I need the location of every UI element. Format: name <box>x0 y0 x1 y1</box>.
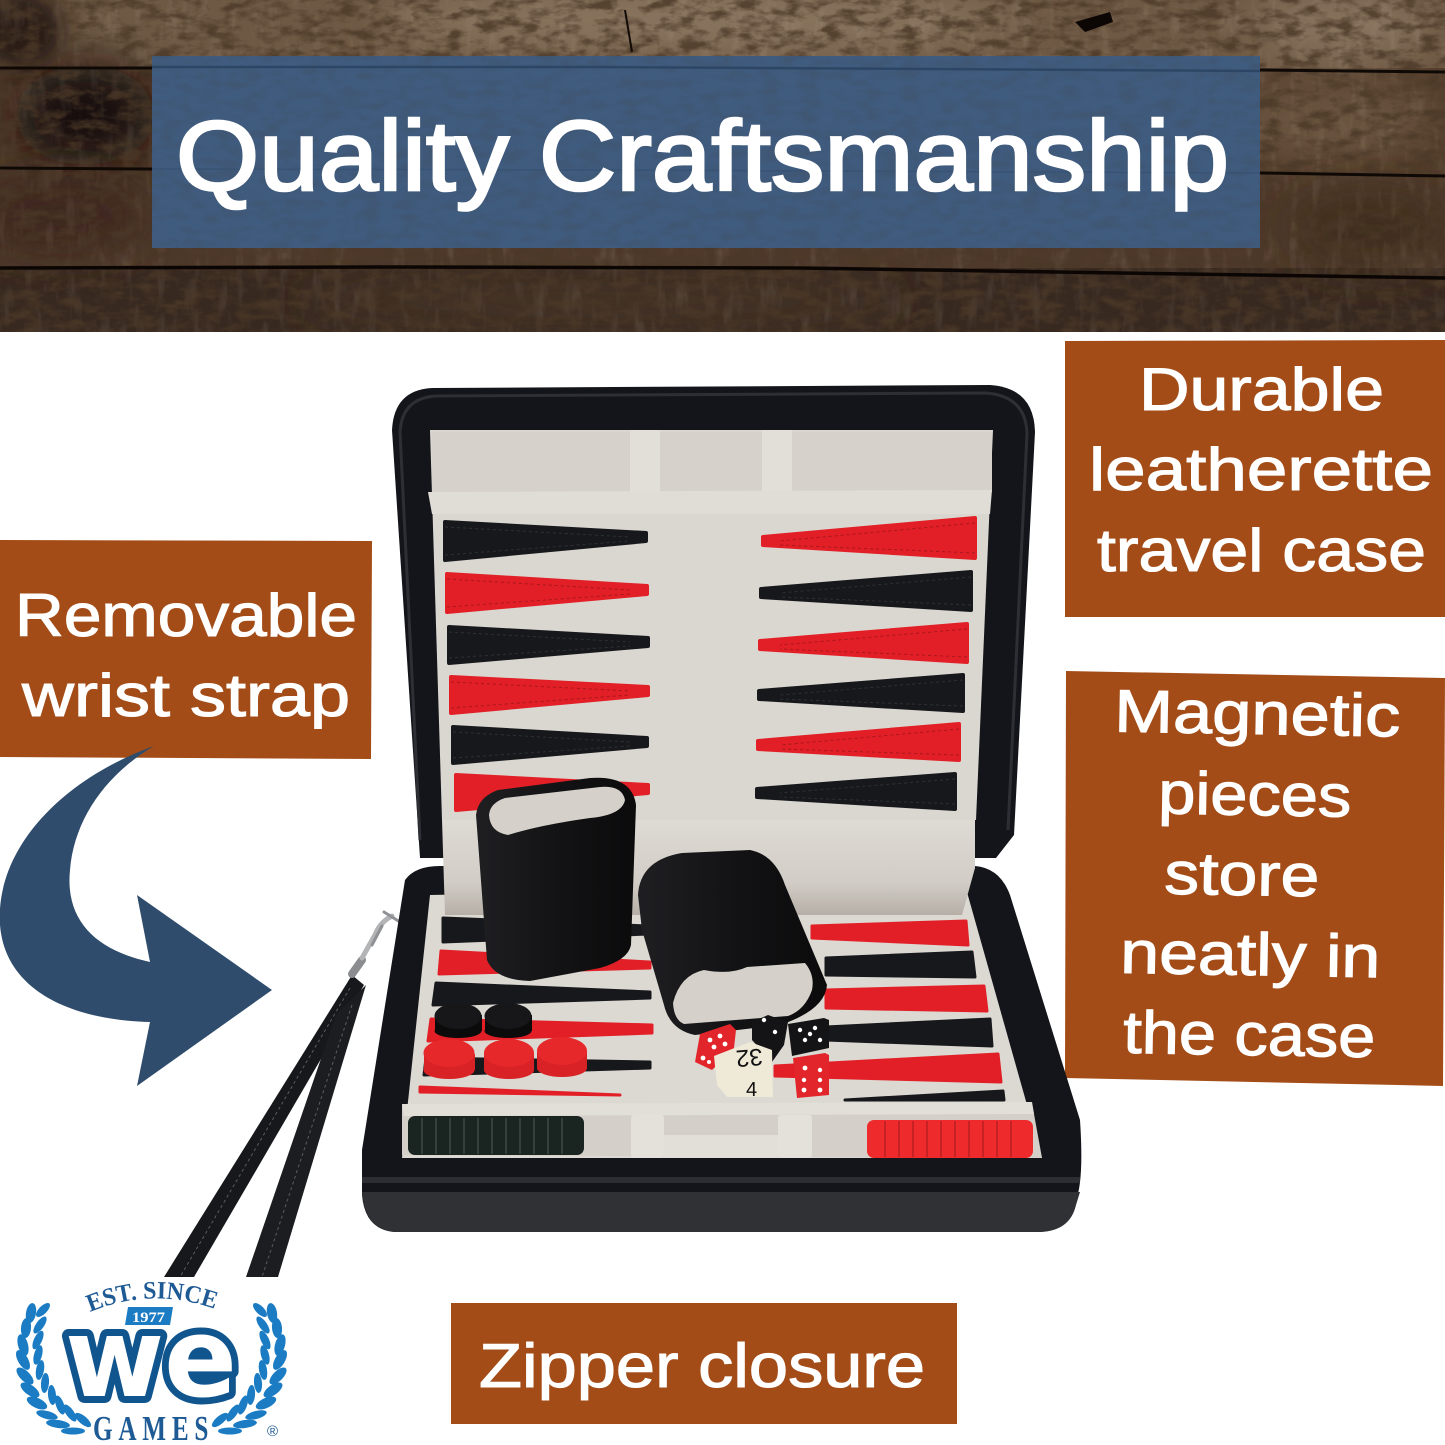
callout: zipper closure <box>451 1303 957 1424</box>
callout: durable leatherette travel case: Durable <box>1139 356 1384 423</box>
callout: durable leatherette travel case <box>1065 340 1445 617</box>
title banner <box>152 56 1260 248</box>
lower board points <box>420 918 1004 1100</box>
callout: durable leatherette travel case: travel case <box>1097 517 1426 584</box>
upper lid <box>392 385 1035 858</box>
lid tray <box>428 430 992 514</box>
callout: removable wrist strap: wrist strap <box>21 662 350 729</box>
dice: 4 <box>746 1079 757 1101</box>
callout: removable wrist strap: Removable <box>15 582 357 649</box>
laurel right <box>210 1301 290 1434</box>
lying dice cup <box>638 850 827 1035</box>
arrow pointing to strap <box>0 746 272 1086</box>
standing dice cup <box>476 778 636 981</box>
clasp <box>352 912 400 974</box>
callout: durable leatherette travel case: leatherette <box>1089 436 1433 503</box>
callout: magnetic pieces: store <box>1164 840 1320 909</box>
dice: 32 <box>735 1042 764 1072</box>
zipper line <box>362 1177 1080 1183</box>
base felt <box>402 885 1042 1158</box>
loose checkers <box>424 1003 587 1079</box>
laurel left <box>13 1301 93 1434</box>
est since: EST. SINCE <box>84 1282 218 1312</box>
callout: zipper closure: Zipper closure <box>479 1332 925 1401</box>
wrist strap <box>164 912 400 1277</box>
wood header background <box>0 0 1445 332</box>
case side band <box>362 1192 1080 1232</box>
callout: magnetic pieces: Magnetic <box>1114 678 1401 749</box>
point stitching <box>445 523 975 804</box>
registered mark: ® <box>267 1423 278 1440</box>
riser <box>442 820 975 915</box>
callout: magnetic pieces: neatly in <box>1120 919 1381 990</box>
1977 ribbon <box>125 1307 173 1326</box>
1977 ribbon: 1977 <box>132 1310 166 1326</box>
callout: magnetic pieces: the case <box>1123 999 1376 1070</box>
we wordmark: we <box>65 1294 237 1422</box>
logo: WE Games <box>16 1282 287 1445</box>
black checker stack <box>408 1116 584 1155</box>
lid felt <box>430 430 993 820</box>
title text: Quality Craftsmanship <box>176 100 1229 211</box>
callout: removable wrist strap <box>0 540 372 759</box>
dice <box>695 1015 829 1101</box>
lower case base <box>362 866 1081 1232</box>
lid board points <box>445 518 975 810</box>
red checker stack <box>867 1120 1033 1158</box>
lower tray <box>402 1102 1042 1158</box>
callout: magnetic pieces <box>1065 671 1445 1086</box>
backgammon case <box>362 385 1081 1232</box>
callout: magnetic pieces: pieces <box>1158 759 1352 830</box>
